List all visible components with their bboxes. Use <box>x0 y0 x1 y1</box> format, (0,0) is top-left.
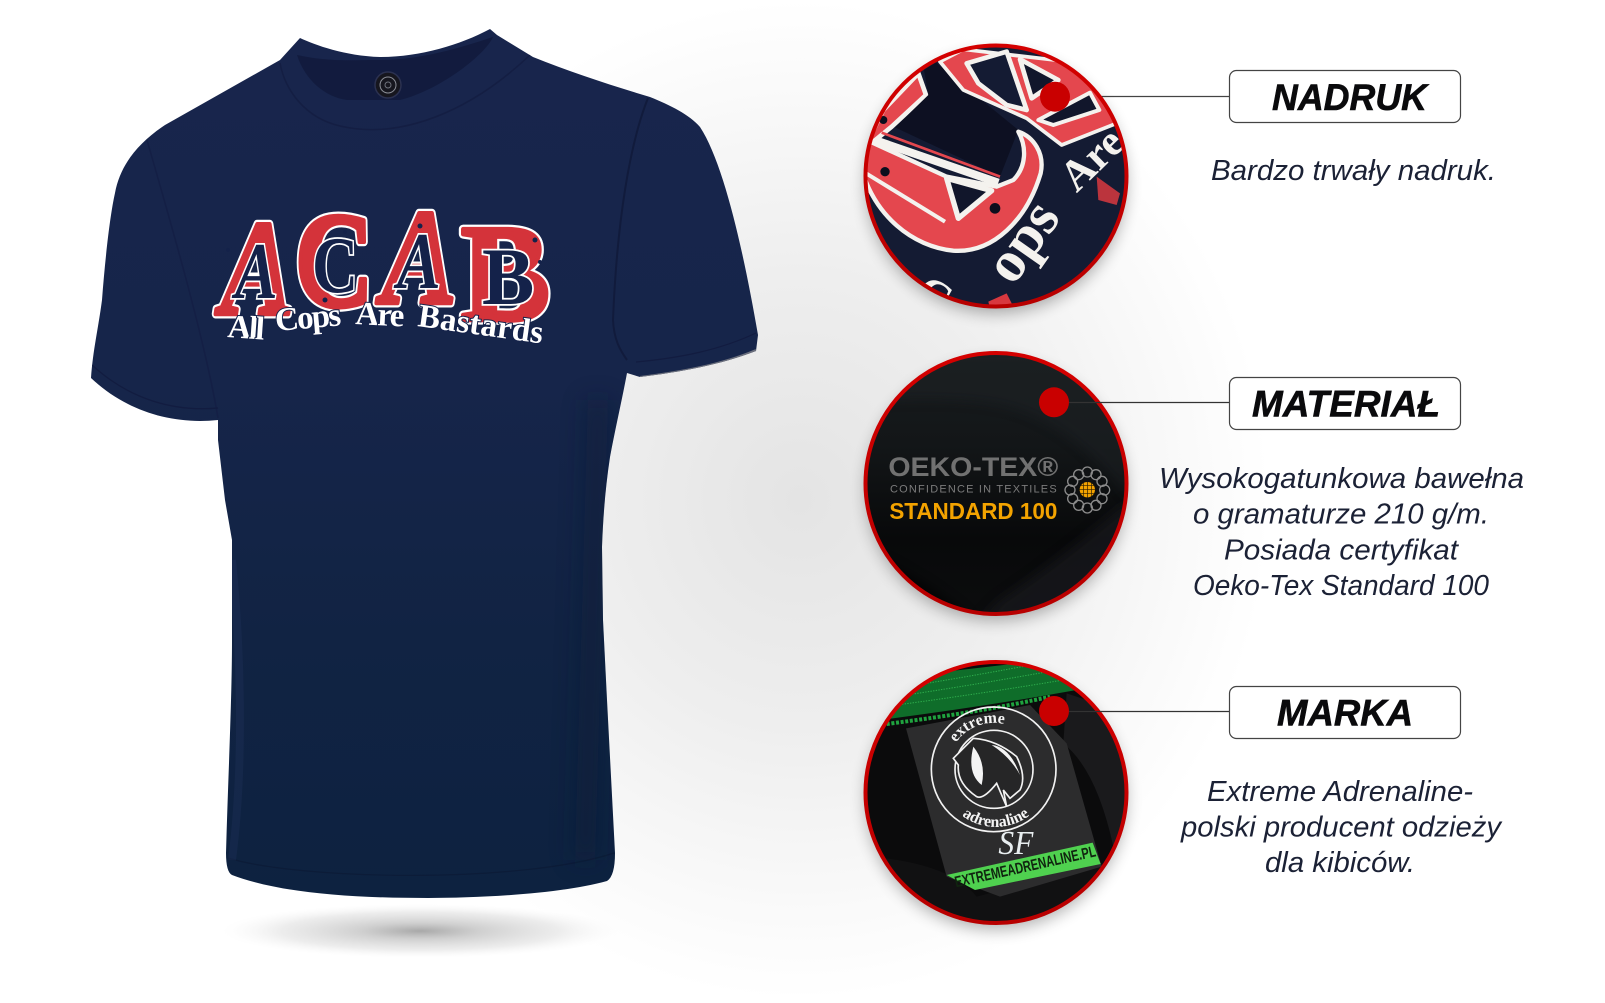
callout: MATERIAŁ <box>860 350 1524 620</box>
description: MATERIAŁ <box>1159 463 1524 602</box>
print subtitle: All Cops Are Bastards: Bastards <box>416 298 546 351</box>
print inner letter outlines: B <box>482 233 534 322</box>
connector line <box>1069 710 1229 712</box>
connector line <box>1069 402 1229 404</box>
label brand words: extreme <box>952 715 1004 741</box>
close-up letter shapes <box>860 49 1117 251</box>
label brand words: SF <box>998 825 1034 862</box>
print distress marks <box>226 224 542 302</box>
print inner letter outlines: C <box>312 220 358 310</box>
detail circle: brand label <box>857 660 1135 938</box>
woven label <box>906 705 1102 897</box>
collar tape <box>890 664 1074 719</box>
print subtitle: All Cops Are Bastards: Are <box>355 296 405 335</box>
red marker dot <box>1039 696 1069 726</box>
print letters: red body: A <box>215 193 294 344</box>
print inner letter outlines <box>231 217 534 322</box>
label green strip <box>947 843 1101 891</box>
description: MARKA: dla kibiców. <box>1265 847 1415 879</box>
shirt body <box>91 29 758 898</box>
product photo: navy t-shirt <box>91 29 758 958</box>
neck label button <box>375 72 401 98</box>
shirt floor shadow <box>222 904 618 958</box>
logo wordmark: STANDARD 100 <box>889 498 1057 524</box>
heading: NADRUK <box>1230 70 1460 122</box>
description: MARKA: Extreme Adrenaline- <box>1207 776 1473 808</box>
shirt print: ACAB lettering <box>215 182 550 351</box>
heading: MATERIAŁ <box>1230 378 1460 430</box>
print inner letter outlines: A <box>231 226 278 316</box>
heading: MARKA: MARKA <box>1277 692 1413 734</box>
print letters: red body: C <box>295 185 374 336</box>
print letters: white edge: A <box>215 193 294 344</box>
detail circle: OEKO-TEX fabric <box>860 350 1132 620</box>
close-up fabric text: ops <box>971 188 1072 294</box>
print subtitle: All Cops Are Bastards <box>226 296 546 351</box>
heading: NADRUK: NADRUK <box>1272 77 1429 118</box>
red marker dot <box>1039 387 1069 417</box>
print letters: white edge: A <box>376 182 456 333</box>
label green strip: EXTREMEADRENALINE.PL <box>953 843 1098 891</box>
red marker dot <box>1040 82 1070 112</box>
callout: MARKA <box>857 660 1503 938</box>
print letters: red body: B <box>461 198 550 351</box>
OEKO-TEX logo <box>890 457 1110 519</box>
label brand words <box>952 715 1034 854</box>
logo wordmark: CONFIDENCE IN TEXTILES <box>890 484 1057 496</box>
print letters: white edge: C <box>295 185 374 336</box>
logo wordmark <box>890 457 1058 519</box>
shirt seams and collar <box>92 37 756 875</box>
print inner letter outlines: A <box>393 217 441 305</box>
close-up splatter <box>879 116 1000 214</box>
description: MATERIAŁ: o gramaturze 210 g/m. <box>1193 498 1489 530</box>
print letters: red body: A <box>376 182 456 333</box>
connector line <box>1090 96 1229 98</box>
print subtitle: All Cops Are Bastards: All <box>226 309 266 348</box>
label animal silhouette <box>953 738 1023 807</box>
description: MATERIAŁ: Oeko-Tex Standard 100 <box>1193 570 1489 602</box>
print letters: red body <box>215 182 550 351</box>
print letters: white edge: B <box>461 198 550 351</box>
close-up fabric text: C <box>906 265 961 327</box>
description: MARKA: polski producent odzieży <box>1180 812 1503 844</box>
callout: NADRUK <box>850 30 1496 330</box>
logo flower emblem <box>1065 467 1110 513</box>
label brand words: adrenaline <box>963 810 1029 827</box>
heading: MATERIAŁ: MATERIAŁ <box>1252 384 1440 424</box>
description: MARKA <box>1180 776 1503 879</box>
print subtitle: All Cops Are Bastards: Cops <box>274 297 343 339</box>
detail circle: print close-up <box>856 44 1136 322</box>
close-up fabric text: Are <box>1050 118 1133 201</box>
heading: MARKA <box>1230 686 1460 738</box>
label crest <box>931 707 1056 832</box>
print letters: white edge <box>215 182 550 351</box>
close-up fabric text <box>906 118 1133 327</box>
logo wordmark: OEKO-TEX® <box>888 452 1059 482</box>
description: NADRUK: Bardzo trwały nadruk. <box>1211 155 1496 187</box>
description: MATERIAŁ: Posiada certyfikat <box>1224 534 1460 566</box>
description: MATERIAŁ: Wysokogatunkowa bawełna <box>1159 463 1524 495</box>
